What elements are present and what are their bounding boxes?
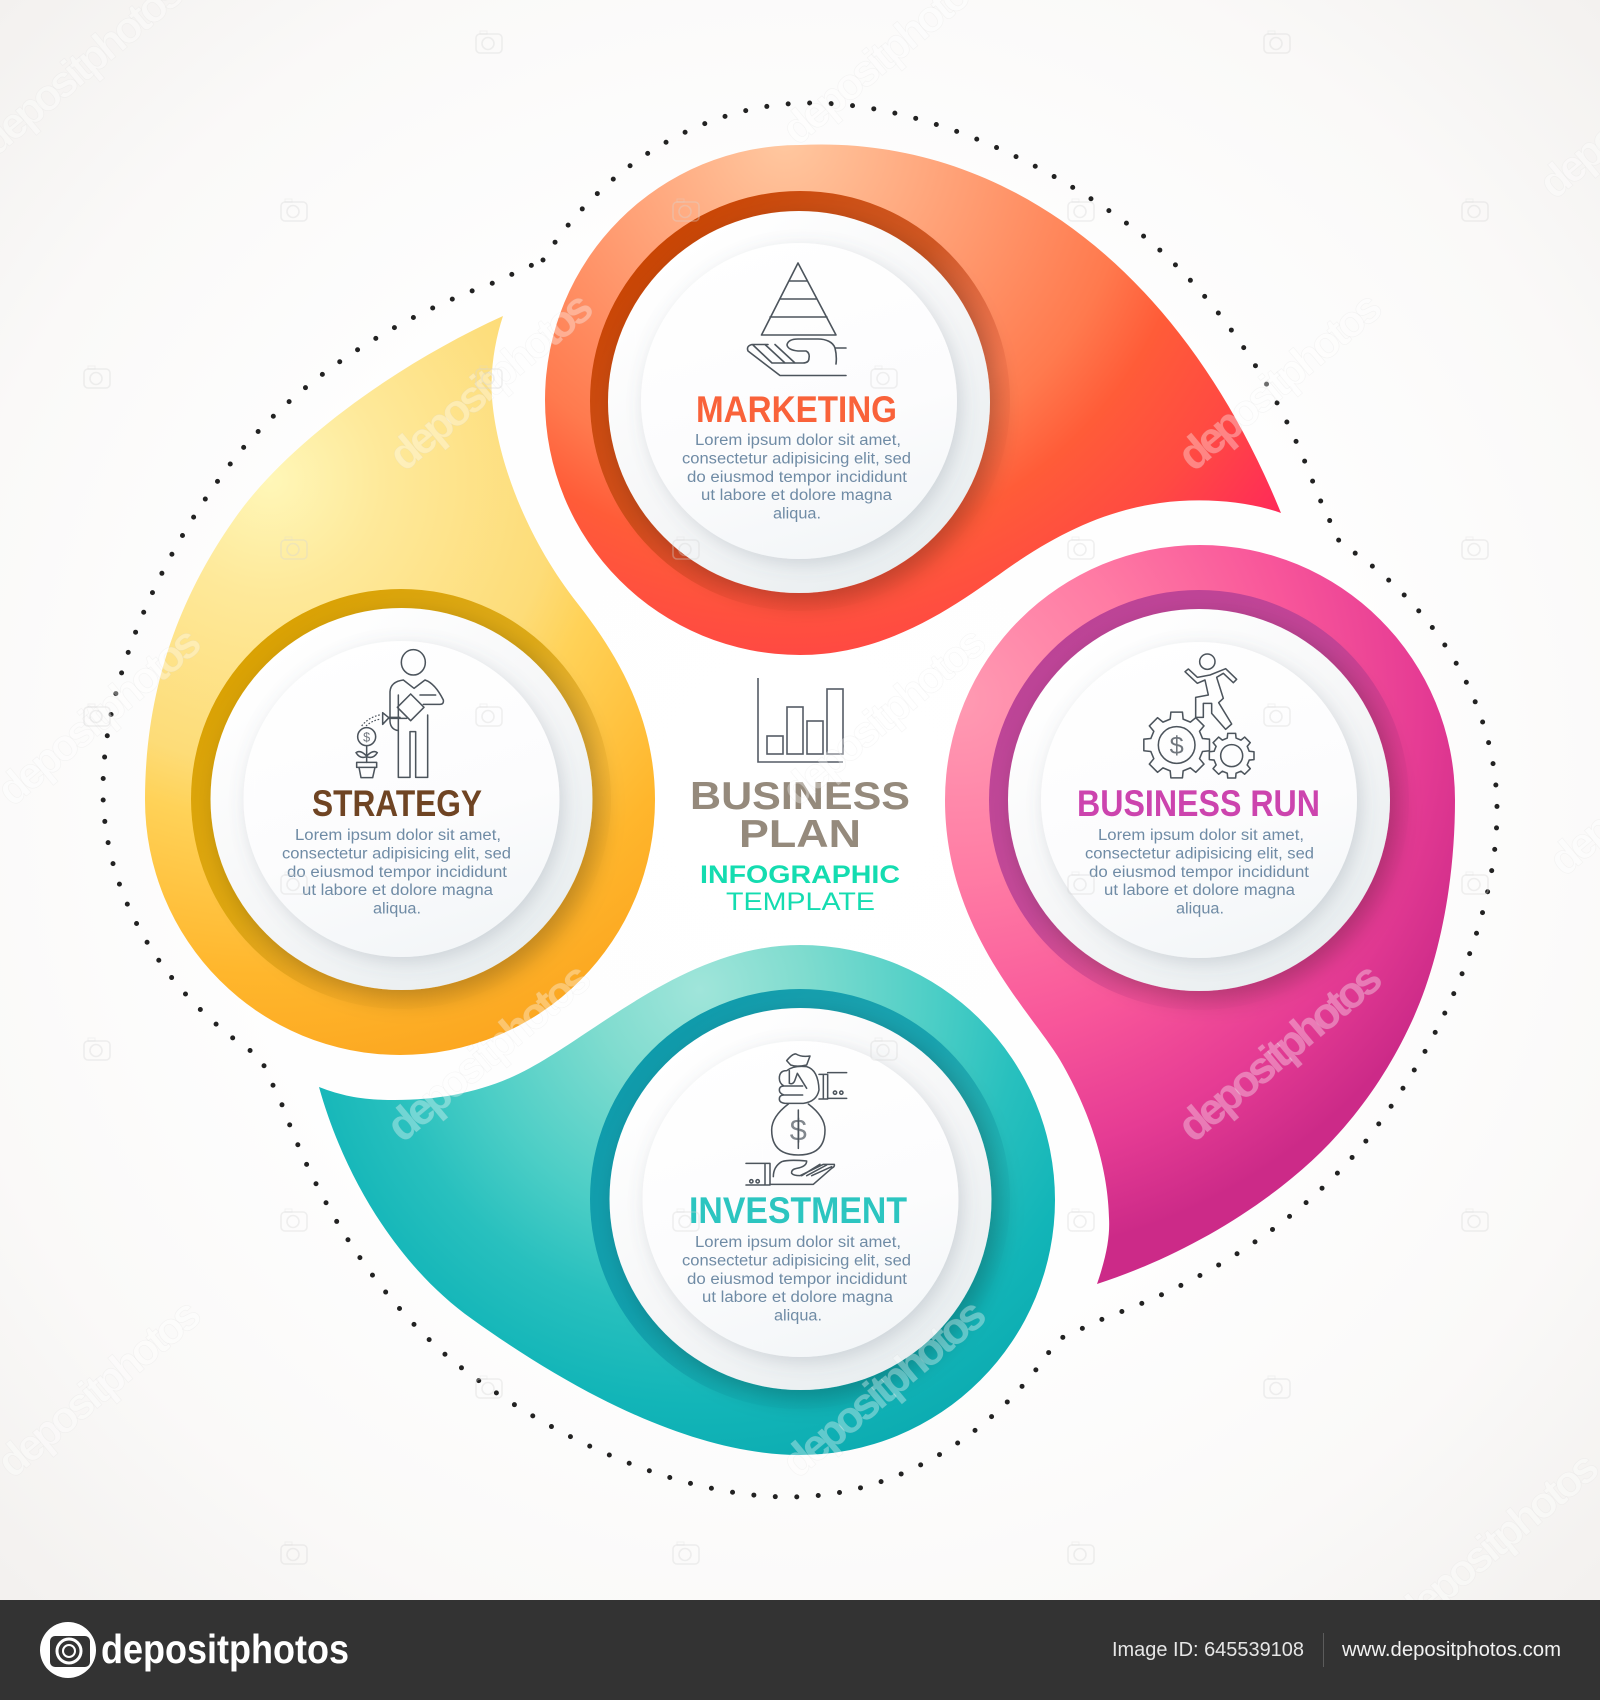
strategy ring — [191, 589, 611, 1009]
strategy text: ut labore et dolore magna — [302, 882, 493, 899]
investment text: aliqua. — [774, 1308, 822, 1324]
heading: business plan: PLAN — [739, 813, 861, 856]
website: www.depositphotos.com — [1341, 1639, 1561, 1661]
strategy text: Lorem ipsum dolor sit amet, — [295, 827, 501, 844]
logo icon: camera — [40, 1622, 96, 1678]
investment text: do eiusmod tempor incididunt — [687, 1271, 908, 1288]
icon: person watering plant: $ — [363, 730, 370, 744]
dotted outline — [103, 103, 1497, 1497]
marketing text: aliqua. — [773, 506, 821, 522]
heading: business plan: BUSINESS — [690, 775, 910, 818]
investment teardrop — [319, 945, 1055, 1455]
marketing title: MARKETING — [696, 389, 897, 430]
center title block — [690, 678, 910, 916]
icon: person watering plant — [356, 650, 443, 778]
strategy outer disc — [210, 608, 592, 990]
subheading: infographic template: TEMPLATE — [726, 888, 875, 916]
strategy text — [282, 827, 511, 918]
marketing ring — [590, 191, 1010, 611]
subheading: infographic template — [700, 861, 900, 916]
watermark camera marks — [84, 31, 1488, 1564]
business run text: ut labore et dolore magna — [1104, 882, 1295, 899]
watermark text: depositphotos — [1168, 953, 1391, 1151]
business run text: do eiusmod tempor incididunt — [1089, 864, 1310, 881]
investment ring — [590, 989, 1010, 1409]
logo wordmark: depositphotos — [101, 1626, 349, 1672]
strategy text: consectetur adipisicing elit, sed — [282, 846, 511, 862]
icon: bar chart — [758, 678, 843, 762]
strategy text: aliqua. — [373, 900, 421, 918]
business run outer disc — [1008, 609, 1390, 991]
footer bar — [0, 1600, 1600, 1700]
investment text: ut labore et dolore magna — [702, 1289, 893, 1306]
investment title: INVESTMENT — [689, 1190, 907, 1231]
marketing text — [682, 432, 911, 522]
panel: marketing — [545, 144, 1281, 655]
business run teardrop — [945, 545, 1455, 1284]
strategy text: do eiusmod tempor incididunt — [287, 864, 508, 881]
icon: pyramid on hand — [748, 263, 846, 376]
marketing text: ut labore et dolore magna — [701, 487, 892, 504]
watermark text: depositphotos — [379, 282, 602, 480]
business run inner disc — [1041, 642, 1357, 958]
watermark text: depositphotos — [772, 1289, 995, 1487]
business run text: consectetur adipisicing elit, sed — [1085, 846, 1314, 862]
panel: business run — [945, 545, 1455, 1284]
heading: business plan — [690, 775, 910, 856]
marketing teardrop — [545, 144, 1281, 655]
panel: investment — [319, 945, 1055, 1455]
investment text — [682, 1234, 911, 1324]
marketing text: do eiusmod tempor incididunt — [687, 469, 908, 486]
business run text — [1085, 827, 1314, 918]
strategy teardrop — [145, 316, 655, 1055]
business run ring — [989, 590, 1409, 1010]
icon: runner on gears: $ — [1170, 732, 1184, 760]
icon: runner on gears — [1144, 654, 1254, 778]
marketing text: Lorem ipsum dolor sit amet, — [695, 432, 901, 449]
investment text: consectetur adipisicing elit, sed — [682, 1252, 911, 1270]
marketing text: consectetur adipisicing elit, sed — [682, 450, 911, 468]
watermark text: depositphotos — [1168, 282, 1391, 480]
watermark text: depositphotos — [377, 953, 600, 1151]
panel: strategy — [145, 316, 655, 1055]
icon: money bag and hands — [746, 1054, 847, 1185]
marketing inner disc — [641, 243, 957, 559]
investment text: Lorem ipsum dolor sit amet, — [695, 1234, 901, 1251]
investment outer disc — [610, 1008, 992, 1390]
watermark text: depositphotos — [772, 617, 995, 815]
image id: Image ID: 645539108 — [1112, 1639, 1304, 1661]
business run text: Lorem ipsum dolor sit amet, — [1098, 827, 1304, 844]
marketing outer disc — [608, 211, 990, 593]
investment inner disc — [642, 1041, 958, 1357]
business run text: aliqua. — [1176, 900, 1224, 918]
strategy title: STRATEGY — [312, 783, 482, 824]
icon: money bag and hands: $ — [790, 1114, 807, 1148]
business run title: BUSINESS RUN — [1077, 783, 1320, 824]
strategy inner disc — [244, 641, 560, 957]
subheading: infographic template: INFOGRAPHIC — [700, 861, 900, 889]
